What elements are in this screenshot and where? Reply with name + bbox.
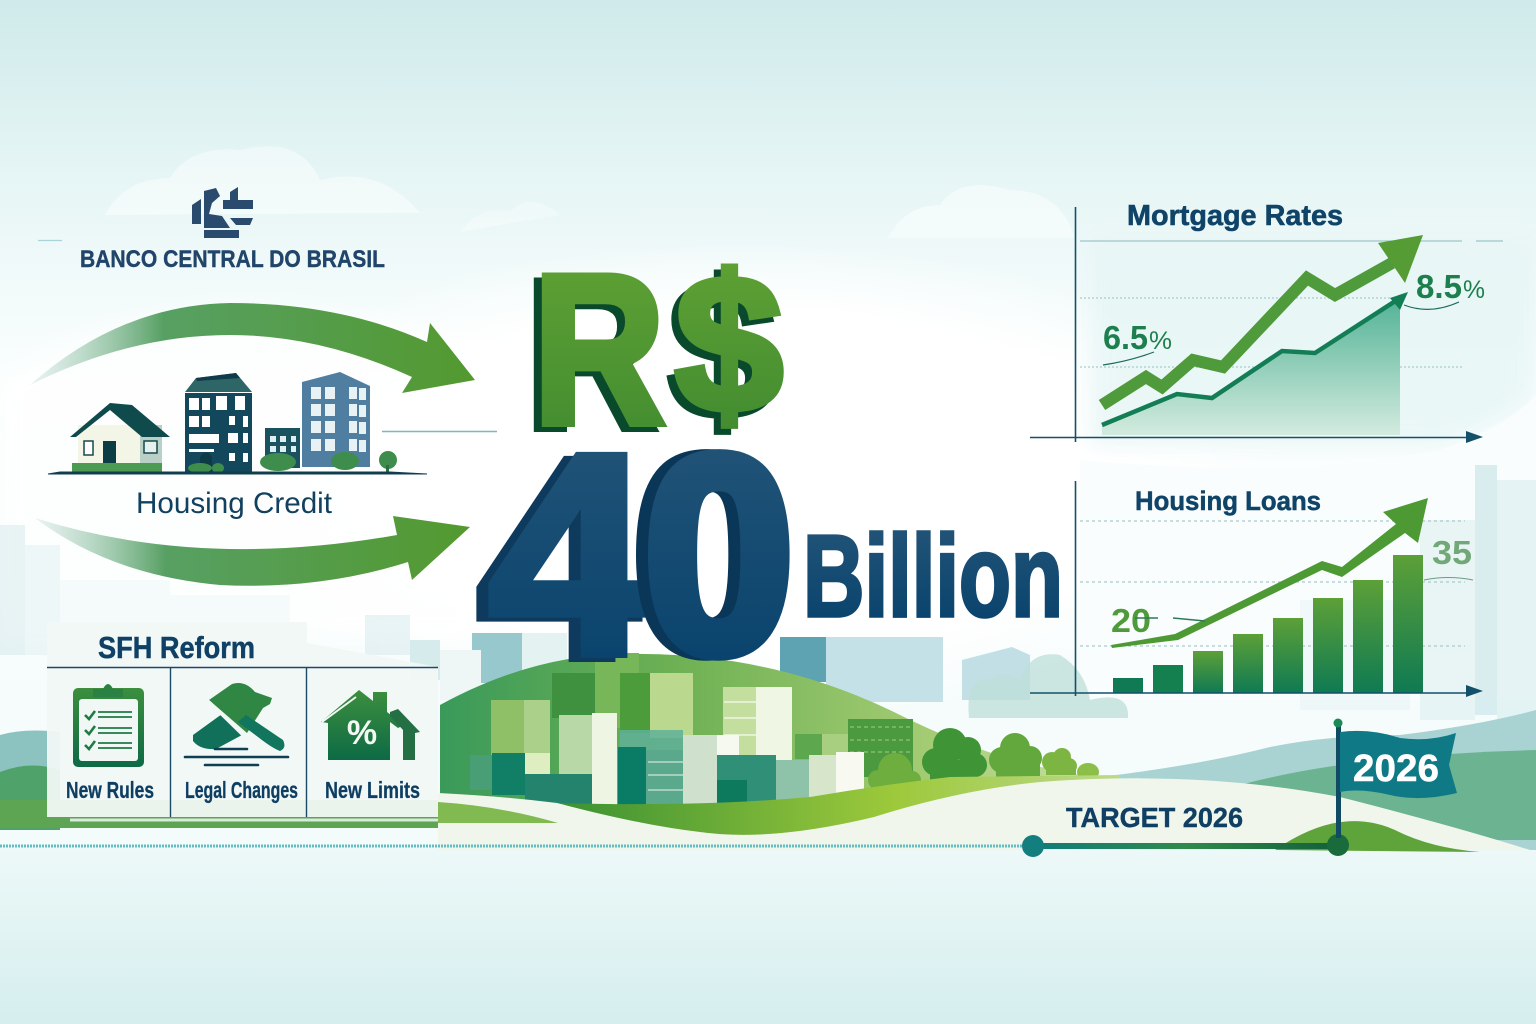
logo: Banco Central do Brasil [80,187,385,273]
value 20: 20 [1111,602,1151,639]
currency R$: $ [675,236,783,453]
apartment block dark [185,373,252,472]
faded skyline left [0,525,410,655]
horizon line [0,844,1030,848]
logo wordmark: BANCO CENTRAL DO BRASIL [80,246,385,273]
logo mark [192,187,253,238]
green mound [1275,821,1480,852]
amount 40 [476,394,795,720]
arrow: top credit arrow [30,303,475,393]
axes [1030,207,1470,442]
flag year: 2026 [1353,748,1439,790]
icon: house with percent [321,690,420,760]
chart: Mortgage Rates: % [1463,276,1485,304]
white swoosh right [1080,395,1536,700]
currency R$: R [533,231,665,469]
background floor [0,848,1536,1024]
small block [265,428,300,468]
percent sign: % [347,714,377,752]
icon: clipboard [73,684,144,767]
chart heading: Housing Loans [1135,486,1321,516]
clouds [105,146,1075,238]
chart: Mortgage Rates [1030,200,1503,443]
label: New Limits: New Limits [325,777,420,803]
headline figure: R$ 40 Billion [476,231,1063,720]
arrow: bottom credit arrow [35,516,470,586]
label: New Rules: New Rules [66,777,154,803]
icon: gavel [185,683,288,765]
city cluster [470,653,913,807]
house [70,403,170,472]
shrubs [188,451,397,473]
bars [1113,555,1423,693]
amount 40: 0 [643,397,795,712]
value 8.5%: 8.5 [1416,268,1462,305]
white road band [438,778,1530,850]
amount 40: 0 [631,397,783,712]
faded skyline right [1300,465,1536,720]
flag [1340,731,1457,798]
timeline [1033,843,1338,849]
axes [1030,481,1470,696]
left hills [0,731,560,830]
panel: SFH Reform [47,622,438,820]
label: Target 2026: TARGET 2026 [1066,802,1243,833]
unit Billion: Billion [803,511,1063,641]
housing illustration [48,372,427,474]
connector line [382,430,497,432]
currency R$: R [525,236,657,474]
label: Legal Changes: Legal Changes [185,777,298,803]
trend arrow [1111,498,1428,648]
amount 40: 4 [476,398,642,720]
trees [868,728,1099,790]
ground line [48,472,427,474]
central white glow [180,240,1300,720]
target milestone [1022,718,1480,857]
flag pole [1336,726,1341,838]
label: Housing Credit: Housing Credit [136,487,333,520]
small left hill [438,802,558,823]
main hill [440,654,1100,830]
apartment block blue [302,372,370,467]
pale teal chart backdrop [1090,240,1536,445]
white swoosh left [0,307,480,640]
pale trees right [968,654,1128,718]
currency R$: $ [668,242,776,459]
trend arrow [1102,263,1392,405]
value 6.5%: 6.5 [1103,319,1148,356]
area series [1102,298,1400,435]
background buildings behind hill [410,633,1030,702]
value 35: 35 [1432,534,1472,571]
distant hills right [1100,710,1536,850]
currency R$ [525,231,783,474]
chart: Mortgage Rates: % [1149,327,1172,355]
heading: SFH Reform: SFH Reform [98,630,255,665]
chart heading: Mortgage Rates [1127,200,1343,232]
green wave [557,775,1120,840]
chart: Housing Loans [1030,481,1483,697]
amount 40: 4 [488,394,654,716]
